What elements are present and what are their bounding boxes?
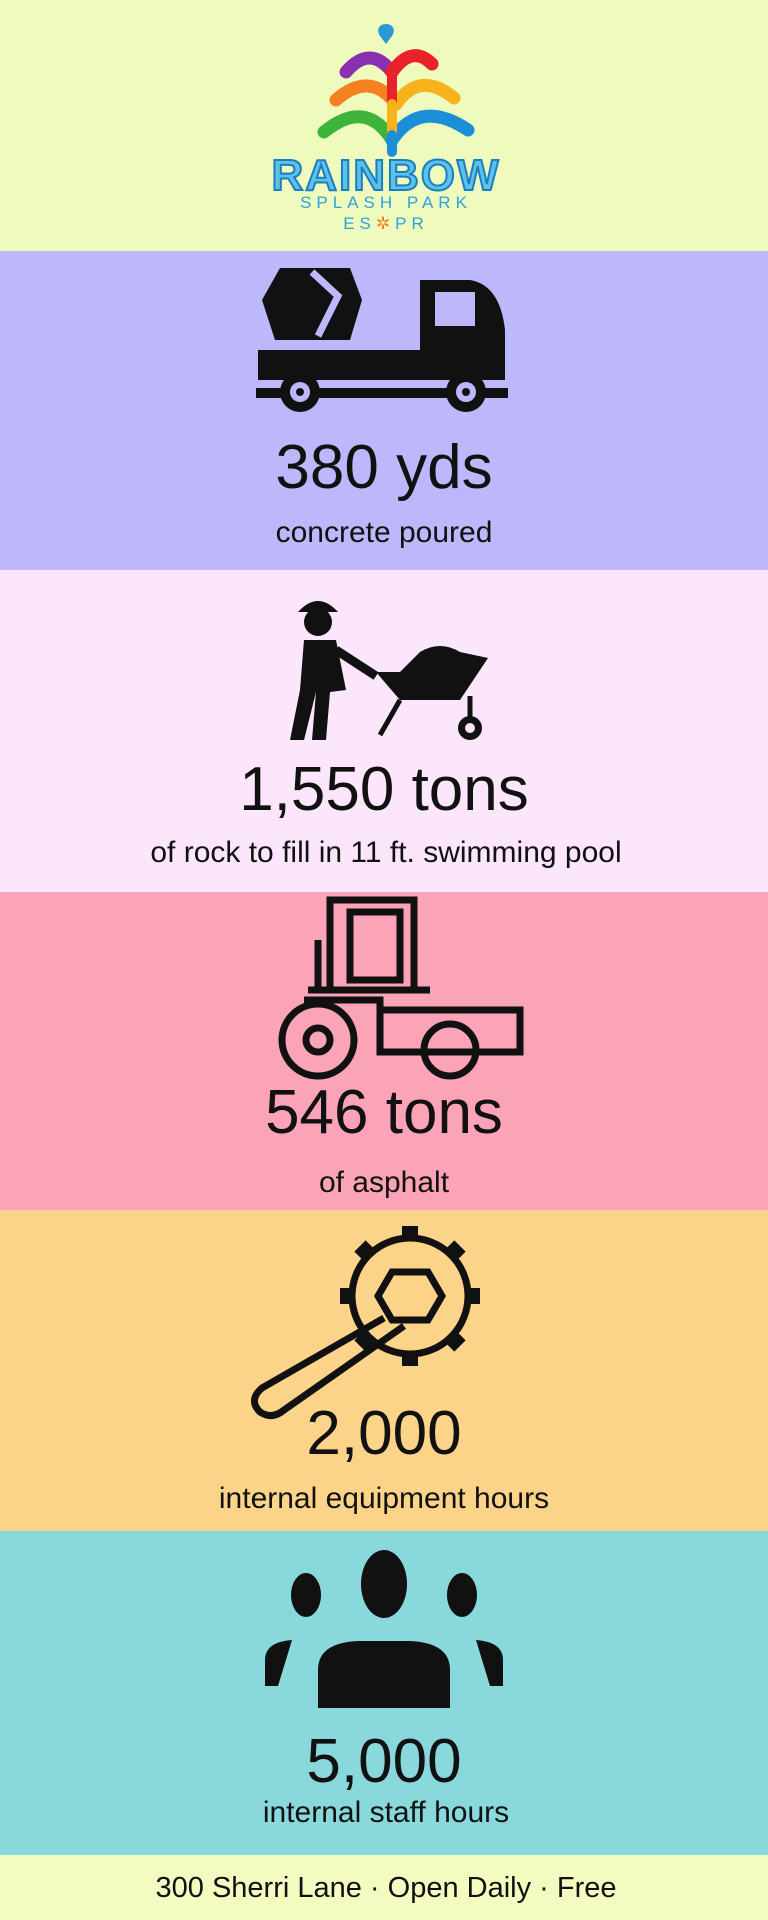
panel: staff (0, 1531, 768, 1855)
panel: asphalt (0, 892, 768, 1210)
stat: 5,000: 5,000 (306, 1727, 462, 1796)
icon: gear and wrench (254, 1226, 480, 1416)
panel: logo header (0, 0, 768, 251)
label: concrete poured: concrete poured (276, 516, 492, 549)
icon: road roller (282, 900, 520, 1076)
stat: 380 yds: 380 yds (275, 433, 493, 502)
panel: concrete (0, 251, 768, 570)
label: of asphalt: of asphalt (319, 1166, 450, 1199)
panel: rock fill (0, 570, 768, 892)
stat: 1,550 tons: 1,550 tons (239, 755, 529, 824)
footer: 300 Sherri Lane · Open Daily · Free (156, 1872, 616, 1904)
stat: 546 tons: 546 tons (265, 1078, 503, 1147)
icon: rainbow fountain (324, 24, 468, 152)
footer (0, 1855, 768, 1920)
label: rock fill: of rock to fill in 11 ft. swimming pool (150, 836, 622, 869)
panel: logo header: ES✲PR (343, 214, 429, 233)
panel: logo header: SPLASH PARK (300, 193, 472, 212)
icon: worker with wheelbarrow (290, 601, 488, 740)
logo wordmark: RAINBOW (271, 151, 501, 200)
icon: concrete mixer truck (256, 268, 508, 412)
stat: 2,000: 2,000 (306, 1399, 462, 1468)
panel: equipment (0, 1210, 768, 1531)
icon: people group (265, 1550, 503, 1708)
label: internal equipment hours: internal equipment hours (219, 1482, 549, 1515)
label: internal staff hours: internal staff hours (263, 1796, 509, 1829)
